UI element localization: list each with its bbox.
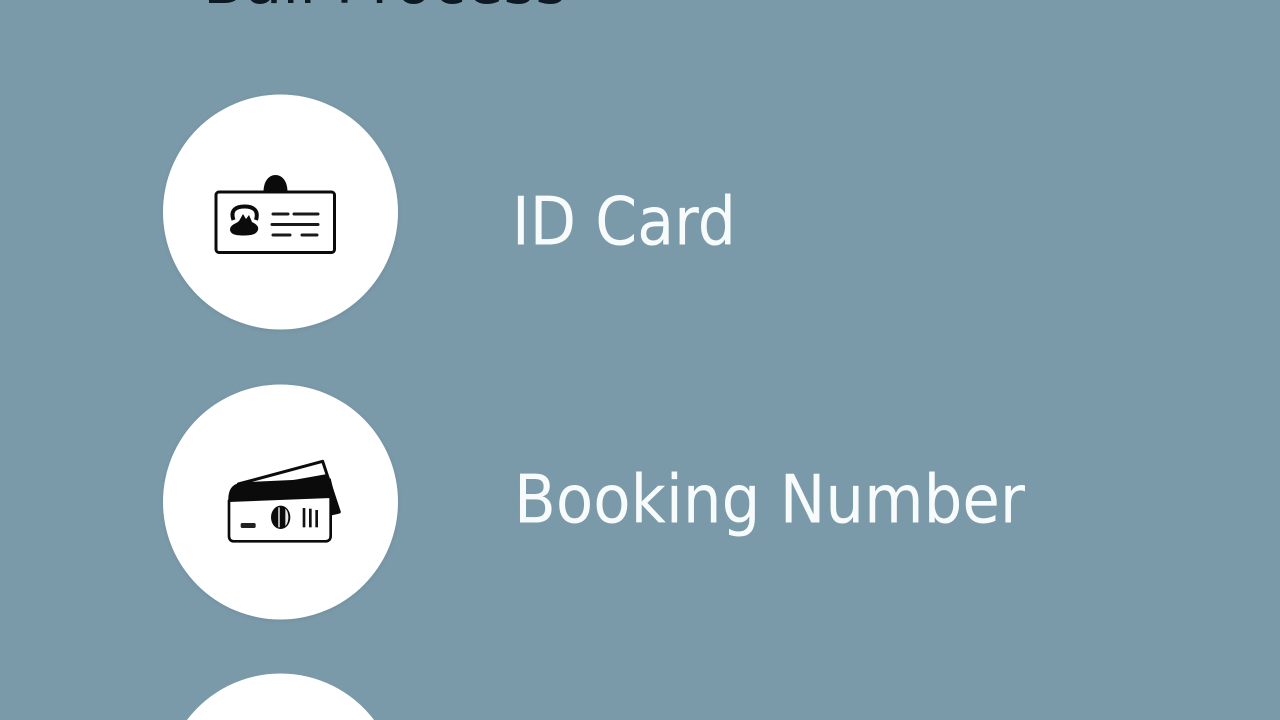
label: Booking Number: Booking Number — [514, 460, 1025, 538]
circle: Booking Number — [163, 384, 398, 620]
item: ID Card — [163, 94, 736, 330]
circle: third item (cropped) — [187, 674, 374, 720]
item: Booking Number — [163, 384, 1025, 620]
circle: ID Card — [163, 94, 398, 330]
label: ID Card: ID Card — [512, 182, 736, 260]
icon: payment cards — [228, 461, 339, 541]
icon: ID card — [216, 175, 334, 252]
